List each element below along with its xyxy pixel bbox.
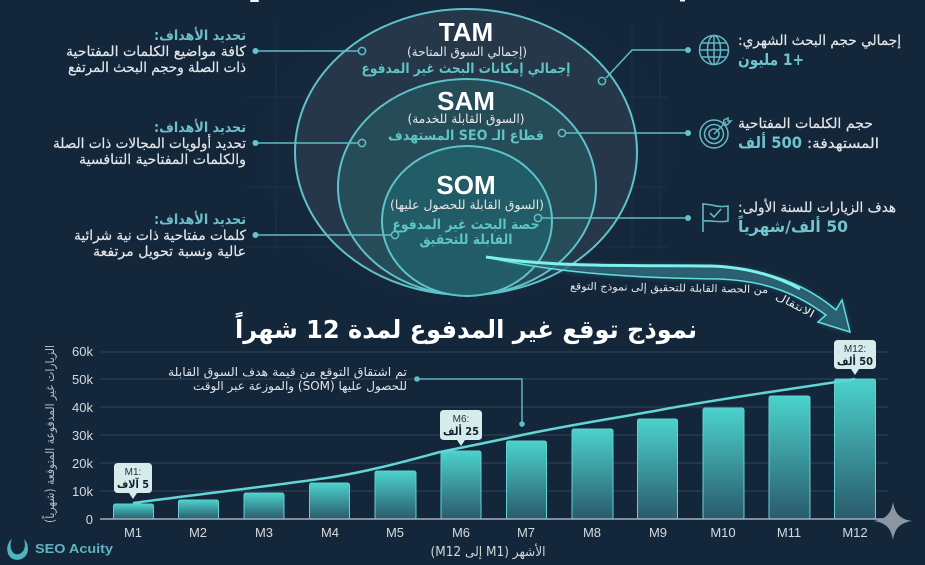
SOM labels: (السوق القابلة للحصول عليها): [390, 197, 544, 213]
callout: M6: 25 ألف: [443, 424, 479, 438]
x axis labels: M8: [583, 525, 601, 540]
stat: target keyword volume: حجم الكلمات المفتاحية: [738, 116, 873, 132]
trend line: [133, 379, 855, 503]
y axis labels: 10k: [72, 484, 93, 499]
x axis labels: M7: [517, 525, 535, 540]
callout: M6: M6:: [453, 414, 469, 425]
y axis labels: 40k: [72, 400, 93, 415]
TAM labels: (إجمالي السوق المتاحة): [407, 44, 527, 60]
icon: globe: [700, 36, 728, 64]
stat: first-year traffic goal: هدف الزيارات للسنة الأولى:: [738, 198, 896, 216]
stat: first-year traffic goal: [738, 198, 896, 236]
x axis title: الأشهر (M1 إلى M12): [430, 543, 546, 560]
left text: SAM goals: والكلمات المفتاحية التنافسية: [79, 152, 246, 168]
y axis title: الزيارات غير المدفوعة المتوقعة (شهرياً): [41, 345, 58, 523]
TAM labels: إجمالي إمكانات البحث غير المدفوع: [362, 61, 570, 77]
circle: SAM: [338, 79, 596, 295]
callout: M12: M12:: [844, 344, 866, 355]
x axis labels: M2: [189, 525, 207, 540]
x axis labels: M11: [777, 525, 801, 540]
x axis labels: M10: [710, 525, 736, 540]
TAM labels: [362, 17, 570, 77]
annotation connector: [414, 376, 525, 427]
callout: M1: M1:: [125, 467, 141, 478]
connectors: [252, 47, 691, 239]
SOM labels: SOM: [436, 170, 496, 200]
callout: M12: [834, 340, 876, 375]
SOM labels: حصة البحث غير المدفوع: [392, 217, 540, 233]
left text: SAM goals: [53, 119, 246, 168]
arrow caption: الانتقال: [774, 290, 816, 321]
SAM labels: قطاع الـ SEO المستهدف: [388, 128, 544, 144]
x axis labels: [124, 525, 868, 540]
stat: target keyword volume: [738, 116, 879, 152]
circle: SOM: [382, 146, 552, 296]
x axis labels: M6: [452, 525, 470, 540]
stat: first-year traffic goal: 50 ألف/شهرياً: [738, 214, 848, 236]
clipped top title fragments: [250, 0, 685, 2]
callout: M12: 50 ألف: [837, 354, 873, 368]
y axis labels: 0: [86, 512, 93, 527]
left text: SOM goals: عالية ونسبة تحويل مرتفعة: [93, 244, 246, 260]
left text: SAM goals: تحديد الأهداف:: [154, 119, 246, 136]
y axis labels: 60k: [72, 344, 93, 359]
x axis labels: M5: [386, 525, 404, 540]
stat: monthly search volume: إجمالي حجم البحث الشهري:: [738, 33, 901, 49]
x axis labels: M12: [842, 525, 868, 540]
icon: sparkle: [874, 502, 912, 540]
annotation text: تم اشتقاق التوقع من قيمة هدف السوق القابلة: [168, 365, 407, 380]
left text: SAM goals: تحديد أولويات المجالات ذات الصلة: [53, 134, 246, 152]
left text: SOM goals: تحديد الأهداف:: [154, 211, 246, 228]
stat: target keyword volume: 500 ألف: [738, 132, 802, 152]
SOM labels: [390, 170, 544, 248]
annotation text: للحصول عليها (SOM) والموزعة عبر الوقت: [193, 379, 407, 394]
left text: TAM goals: [66, 27, 246, 76]
arrow caption: من الحصة القابلة للتحقيق إلى نموذج التوقع: [570, 281, 768, 296]
callout: M1: 5 آلاف: [117, 477, 149, 491]
icon: target: [700, 118, 731, 148]
logo: [7, 539, 114, 560]
left text: TAM goals: تحديد الأهداف:: [154, 27, 246, 44]
y axis labels: 50k: [72, 372, 93, 387]
x axis labels: M3: [255, 525, 273, 540]
arrow caption: [570, 281, 816, 321]
y axis labels: 30k: [72, 428, 93, 443]
stat: target keyword volume: المستهدفة:: [807, 136, 879, 152]
left text: SOM goals: كلمات مفتاحية ذات نية شرائية: [74, 228, 246, 244]
SAM labels: SAM: [437, 86, 495, 116]
arrow: SOM to forecast: [486, 257, 850, 332]
annotation text: [168, 365, 407, 394]
chart title: نموذج توقع غير المدفوع لمدة 12 شهراً: [235, 312, 697, 345]
stat: monthly search volume: +1 مليون: [738, 50, 804, 69]
bar chart: [41, 344, 888, 560]
callout: M6: [440, 410, 482, 446]
bars: [114, 379, 876, 519]
x axis labels: M9: [649, 525, 667, 540]
stat: monthly search volume: [738, 33, 901, 69]
x axis labels: M4: [321, 525, 339, 540]
TAM labels: TAM: [439, 17, 493, 47]
x axis labels: M1: [124, 525, 142, 540]
circle: TAM: [295, 9, 637, 295]
y axis labels: [72, 344, 93, 527]
left text: TAM goals: ذات الصلة وحجم البحث المرتفع: [68, 60, 246, 76]
SAM labels: (السوق القابلة للخدمة): [408, 111, 524, 127]
logo: SEO Acuity: [35, 541, 114, 556]
callout: M1: [114, 463, 152, 499]
SOM labels: القابلة للتحقيق: [420, 232, 512, 248]
nested market circles: [295, 9, 637, 296]
icon: flag: [703, 203, 728, 232]
SAM labels: [388, 86, 544, 144]
y axis labels: 20k: [72, 456, 93, 471]
left text: TAM goals: كافة مواضيع الكلمات المفتاحية: [66, 44, 246, 60]
left text: SOM goals: [74, 211, 246, 260]
